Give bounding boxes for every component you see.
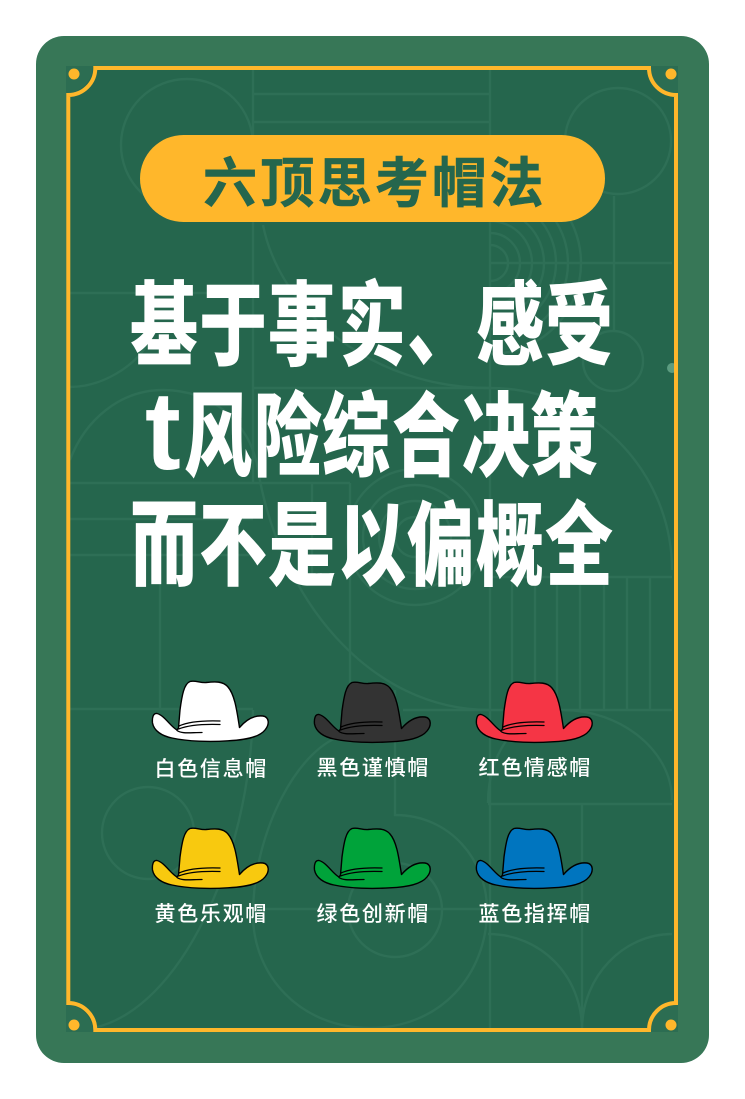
headline line 2: t bbox=[145, 369, 181, 493]
label: blue hat: 蓝色指挥帽 bbox=[478, 903, 592, 926]
hat: black bbox=[314, 682, 430, 742]
label: yellow hat: 黄色乐观帽 bbox=[154, 903, 268, 926]
headline line 3: 而不是以偏概全 bbox=[130, 496, 613, 598]
headline line 1: 基于事实、感受 bbox=[130, 276, 613, 378]
decorative dot on right edge bbox=[667, 363, 677, 373]
label: green hat: 绿色创新帽 bbox=[316, 903, 430, 926]
headline line 2: 风险综合决策 bbox=[184, 387, 598, 489]
label: black hat: 黑色谨慎帽 bbox=[316, 757, 430, 780]
headline bbox=[130, 276, 613, 598]
title pill bbox=[140, 135, 605, 222]
hat: white bbox=[152, 681, 268, 741]
title text: 六顶思考帽法 bbox=[203, 154, 547, 214]
hat: yellow bbox=[152, 828, 268, 888]
label: red hat: 红色情感帽 bbox=[478, 757, 592, 780]
hat: red bbox=[476, 682, 592, 742]
label: white hat: 白色信息帽 bbox=[154, 758, 268, 781]
hat: green bbox=[314, 828, 430, 888]
frame: gold border with scooped corners bbox=[66, 66, 678, 1032]
panel: inner chalkboard bbox=[67, 67, 678, 1032]
hat: blue bbox=[476, 828, 592, 888]
